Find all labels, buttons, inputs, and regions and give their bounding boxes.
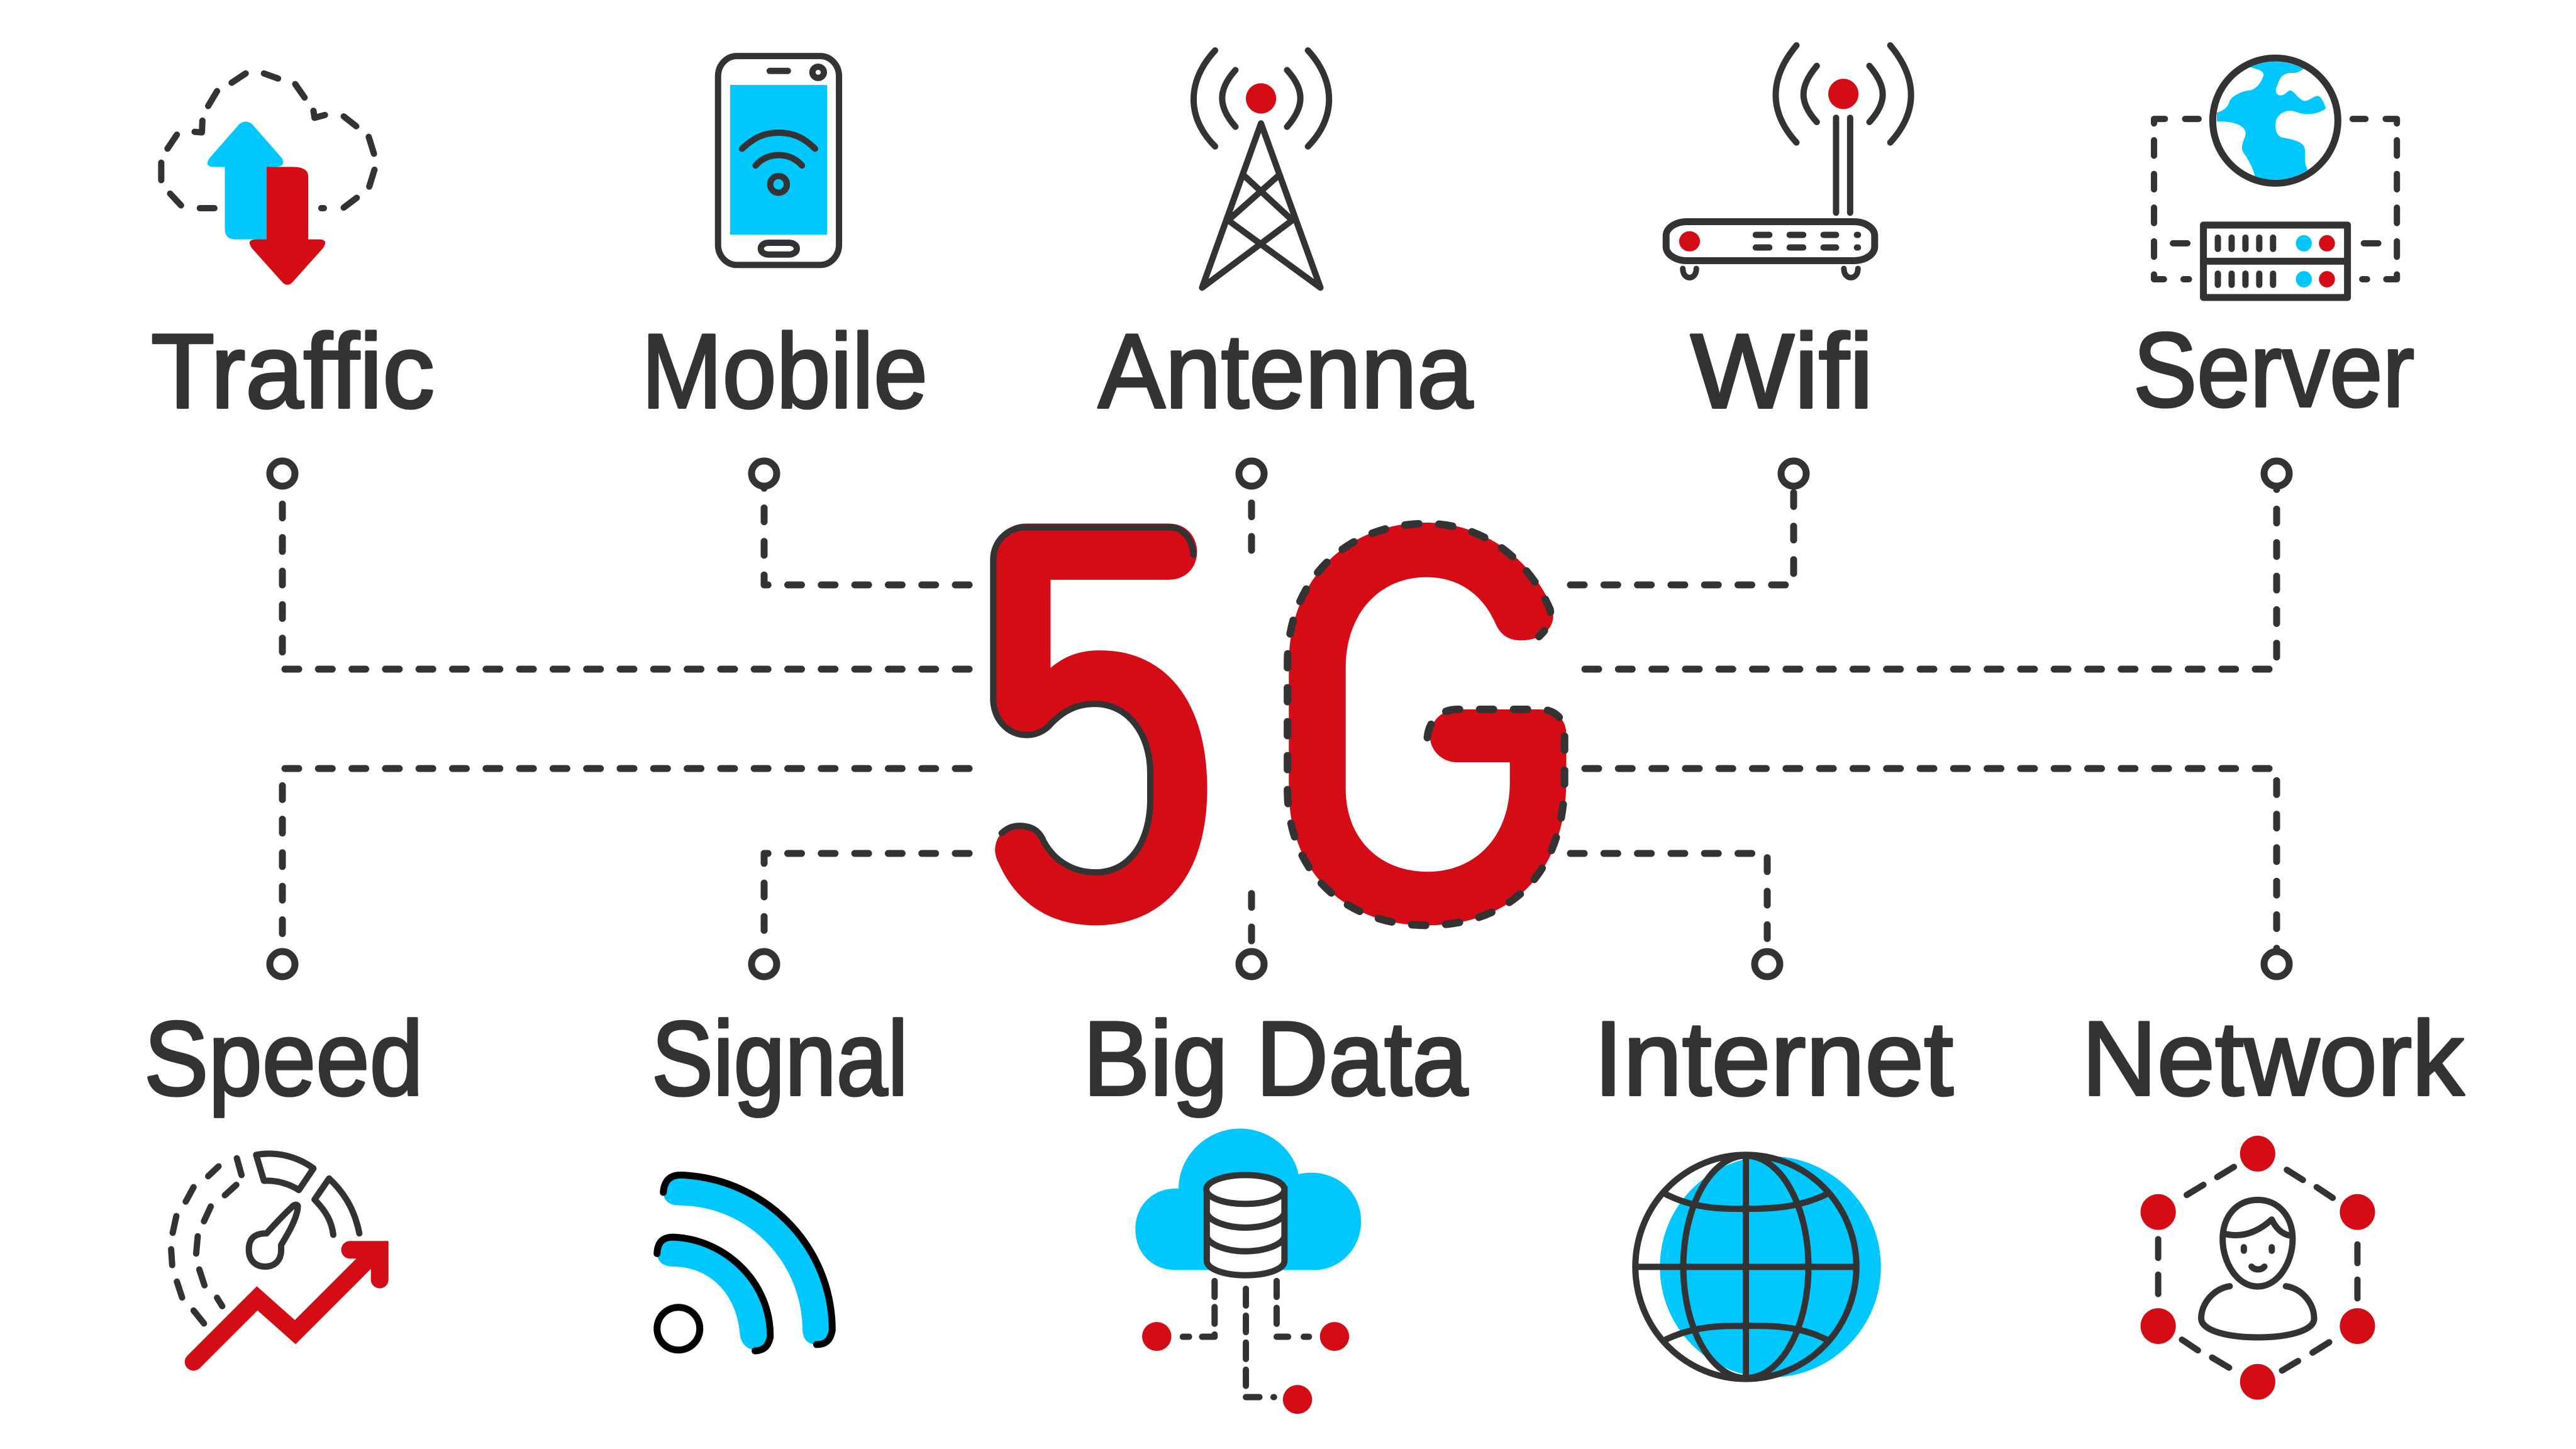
label: Network: Network	[2082, 999, 2465, 1118]
connector lines	[270, 461, 2289, 977]
icon: antenna tower	[1194, 50, 1329, 287]
label: Server: Server	[2133, 311, 2414, 429]
panel: Wifi	[1666, 45, 1911, 430]
label: Antenna: Antenna	[1098, 312, 1474, 430]
digit 5	[993, 524, 1207, 925]
icon: signal waves	[657, 1175, 832, 1351]
panel: Traffic	[151, 74, 435, 430]
panel: Mobile	[641, 56, 928, 430]
label: Big Data: Big Data	[1083, 999, 1468, 1118]
label: Wifi: Wifi	[1690, 312, 1874, 430]
icon: globe and server rack	[2154, 58, 2397, 297]
panel: Antenna	[1098, 50, 1474, 430]
icon: speedometer with rising arrow	[171, 1153, 380, 1362]
panel: Internet	[1594, 999, 1953, 1379]
icon: smartphone with wifi	[718, 56, 839, 265]
panel: Server	[2133, 58, 2414, 429]
panel: Network	[2082, 999, 2465, 1400]
panel: Signal	[652, 999, 908, 1351]
letter G	[1287, 523, 1567, 925]
icon: cloud database	[1135, 1128, 1361, 1414]
panel: Speed	[144, 999, 423, 1362]
label: Traffic: Traffic	[151, 312, 435, 430]
panel: Big Data	[1083, 999, 1468, 1414]
central heading: 5G	[993, 523, 1567, 925]
icon: user hexagon network	[2141, 1136, 2375, 1400]
label: Mobile: Mobile	[641, 312, 928, 430]
label: Speed: Speed	[144, 999, 423, 1118]
icon: wifi router	[1666, 45, 1911, 277]
label: Internet: Internet	[1594, 999, 1953, 1118]
label: Signal: Signal	[652, 999, 908, 1118]
icon: traffic cloud with arrows	[161, 74, 374, 285]
icon: wireframe globe	[1635, 1155, 1881, 1379]
